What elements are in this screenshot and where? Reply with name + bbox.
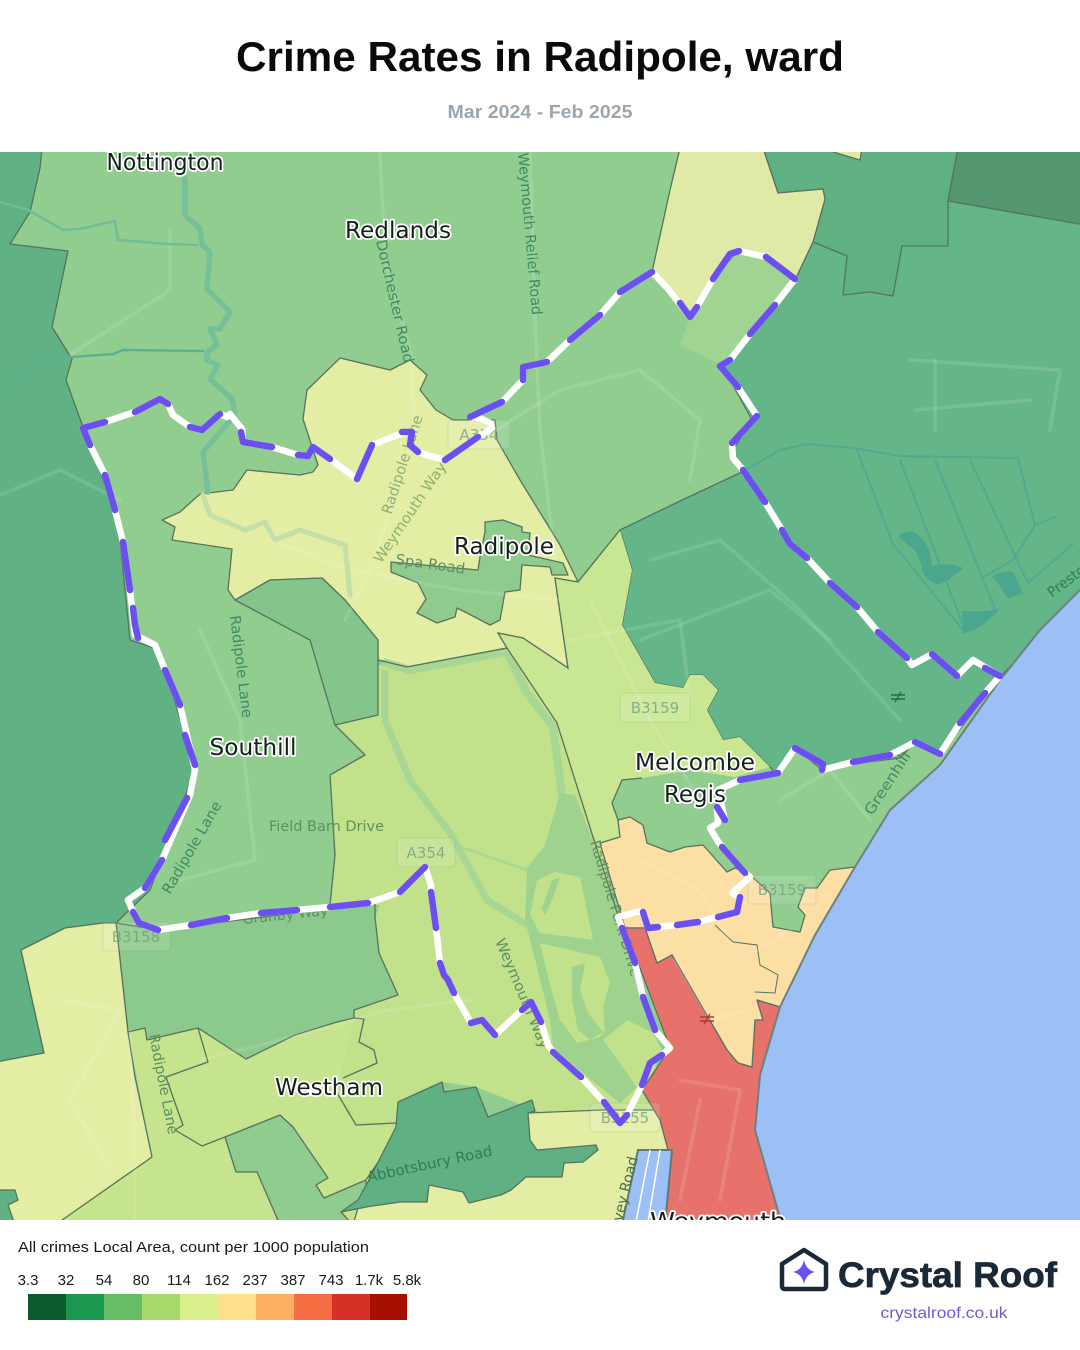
town labels: Redlands (345, 218, 451, 244)
area: Melcombe Regis green edge (612, 778, 642, 820)
road labels: Weymouth Way (371, 459, 451, 566)
legend: title: All crimes Local Area, count per 1000 population (18, 1239, 369, 1256)
area: lighter green by north boundary (680, 251, 795, 365)
legend: scale values: 743 (318, 1272, 344, 1289)
subtitle: date range: Mar 2024 - Feb 2025 (448, 102, 632, 122)
road shields: A354 (407, 844, 445, 862)
area: pale yellow south (353, 1110, 668, 1225)
area: Westham green (225, 1115, 366, 1225)
icon: railway stations (700, 692, 905, 1024)
area: pale yellow north (652, 148, 825, 317)
road labels: Abbotsbury Road (366, 1144, 494, 1186)
area: red south-east fragment (850, 1198, 906, 1225)
ward boundary: white base (83, 251, 1000, 1123)
map: roads (0, 152, 1060, 1220)
area: sand Melcombe Regis (600, 817, 855, 1067)
road labels: Weymouth Relief Road (514, 152, 544, 316)
area: Abbotsbury Road dark green (341, 1082, 598, 1212)
road labels: Weymouth Way (491, 936, 552, 1052)
area: lower light green (55, 1018, 396, 1220)
town labels: Melcombe (635, 750, 755, 776)
road shields: A354 (460, 426, 498, 444)
road labels: Spa Road (394, 552, 466, 578)
area: Westham boundaries (166, 530, 620, 1146)
road labels: Dorchester Road (372, 238, 416, 365)
map: streams and ponds (0, 179, 1073, 634)
road labels: Radipole Lane (226, 615, 254, 719)
legend: scale values: 114 (167, 1272, 191, 1289)
legend: scale values: 162 (204, 1272, 230, 1289)
legend: scale values: 54 (96, 1272, 112, 1289)
road shields: B3155 (601, 1109, 649, 1127)
map: lagoon and park (378, 530, 770, 1103)
area: south-west medium green (116, 903, 398, 1059)
legend: scale values: 1.7k (355, 1272, 384, 1289)
town labels: Southill (210, 735, 296, 761)
road shields: B3159 (631, 699, 679, 717)
road labels (145, 152, 1080, 1223)
road labels: Greenhill (862, 749, 915, 818)
ward boundary: purple dashes (83, 251, 1000, 1123)
legend: scale values: 5.8k (393, 1272, 422, 1289)
town labels: Radipole (454, 534, 554, 560)
area: pale yellow south-west (0, 923, 152, 1225)
area: green island in Radipole (391, 520, 568, 625)
icon: Crystal Roof house logo (782, 1250, 826, 1289)
road labels: Radipole Lane (145, 1033, 180, 1136)
road labels: vey Road (610, 1155, 642, 1223)
legend: scale values: 387 (280, 1272, 306, 1289)
area: western dark green (0, 148, 195, 1062)
area: small dark corner (0, 1190, 18, 1225)
legend: scale values: 80 (133, 1272, 149, 1289)
area: Southill darker patch (235, 578, 378, 725)
logo url: crystalroof.co.uk (880, 1305, 1009, 1322)
legend: scale values: 237 (242, 1272, 268, 1289)
road labels: Field Barn Drive (269, 819, 384, 835)
legend: scale values: 3.3 (18, 1272, 38, 1289)
road shields: B3159 (758, 881, 806, 899)
area: far north-east darkest (948, 148, 1080, 225)
area: pale yellow Radipole (162, 358, 578, 668)
area: red Weymouth town (625, 928, 782, 1225)
road labels: Radipole Lane (380, 413, 427, 516)
map: marina (622, 1150, 672, 1225)
town labels: Weymouth (650, 1209, 786, 1235)
road labels: Radipole Lane (160, 799, 225, 897)
road labels: Granby Way (242, 903, 329, 928)
map: sea (755, 585, 1080, 1225)
legend: scale values (18, 1272, 422, 1289)
town labels (106, 150, 786, 1235)
road shields: B3158 (112, 928, 160, 946)
road labels: Radipole Park Drive (586, 838, 643, 979)
area: north-east inner block (814, 152, 956, 297)
logo wordmark: Crystal Roof (838, 1256, 1057, 1295)
road shields (103, 420, 816, 1132)
area: central light green (330, 656, 769, 1127)
legend: colour scale (28, 1294, 407, 1320)
town labels: Regis (664, 782, 726, 808)
legend: scale values: 32 (58, 1272, 74, 1289)
title: Crime Rates in Radipole, ward (236, 33, 844, 80)
town labels: Nottington (106, 150, 224, 176)
town labels: Westham (275, 1075, 383, 1101)
area: eastern dark green (620, 148, 1080, 772)
area: sand inner line (715, 925, 778, 993)
